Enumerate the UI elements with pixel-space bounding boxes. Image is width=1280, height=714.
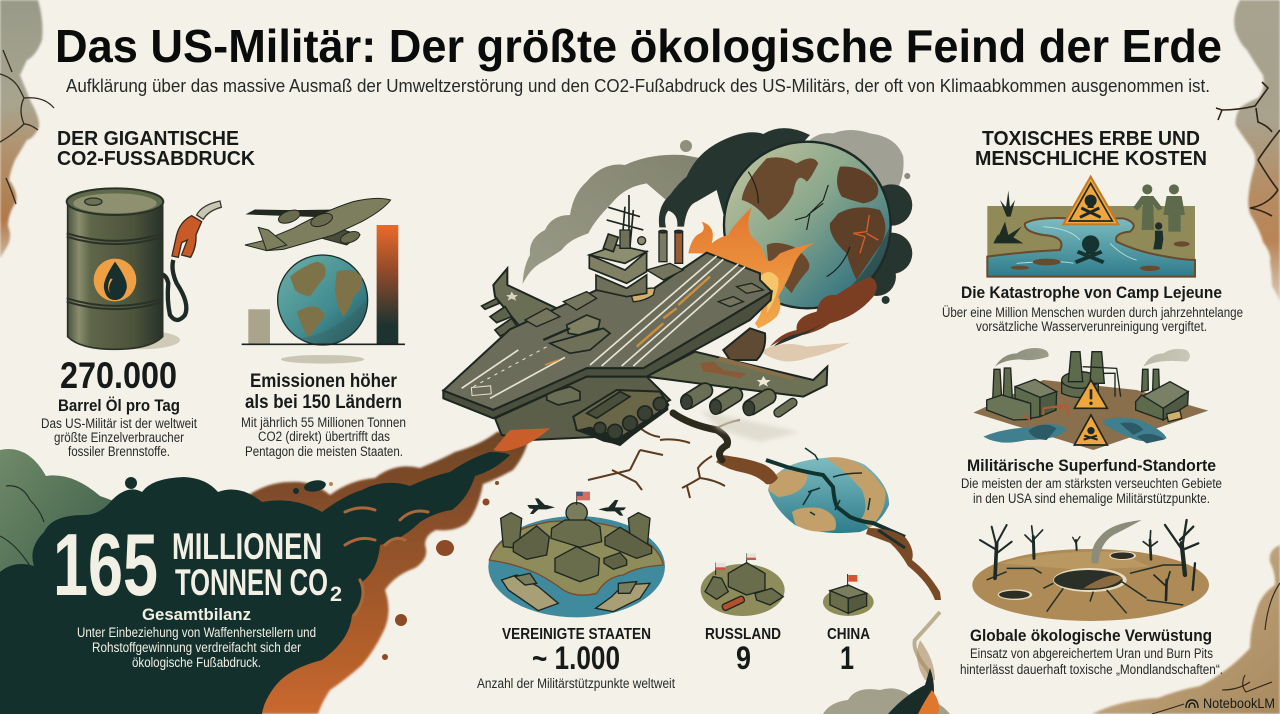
cloud description <box>77 625 316 670</box>
NotebookLM logo: NotebookLM <box>1203 696 1275 711</box>
crack: lower continuation <box>866 528 941 600</box>
subscript 2: 2 <box>330 583 342 606</box>
text: emissions description: CO2 (direkt) übertrifft das <box>258 429 390 444</box>
tank on deck <box>543 315 610 353</box>
dark smoke <box>659 128 810 227</box>
TONNEN CO2: TONNEN CO <box>175 562 328 603</box>
left factory <box>987 368 1057 420</box>
cloud: cracks <box>0 486 44 566</box>
text: largest consumer: Das US-Militär ist der weltweit <box>41 416 197 431</box>
illustration: Russia bases <box>701 553 785 616</box>
label: Russia <box>705 626 781 676</box>
smoke <box>995 348 1190 367</box>
heading: toxic legacy: TOXISCHES ERBE UND <box>982 128 1200 150</box>
illustration: China base <box>823 574 874 616</box>
dead trees <box>980 520 1198 600</box>
icon: airplane, globe, bars <box>242 198 405 364</box>
continents <box>742 157 818 220</box>
cloud: droplets <box>329 481 499 660</box>
cloud description: ökologische Fußabdruck. <box>132 655 261 670</box>
left edge cracked earth <box>0 0 54 258</box>
globe <box>278 255 368 345</box>
text: Camp Lejeune: vorsätzliche Wasserverunreinigung vergiftet. <box>976 319 1207 334</box>
hull side <box>443 292 772 418</box>
centre tanks <box>1062 352 1121 397</box>
heading: CO2 footprint <box>57 128 256 170</box>
text: emissions description <box>241 415 406 459</box>
globe cracks <box>748 172 850 277</box>
heading: toxic legacy <box>975 128 1207 170</box>
left wing <box>493 268 557 327</box>
label: barrel per day: Barrel Öl pro Tag <box>58 396 180 415</box>
stat: 270.000: 270.000 <box>60 355 177 396</box>
text: global devastation: hinterlässt dauerhaft toxische „Mondlandschaften“. <box>960 662 1223 677</box>
illustration: superfund sites <box>973 348 1208 450</box>
label: China: 1 <box>840 640 854 676</box>
engines right <box>688 391 793 413</box>
planes <box>527 498 555 514</box>
right wing <box>647 352 827 397</box>
illustration: US bases <box>488 492 665 617</box>
main crater <box>1053 568 1127 592</box>
stat: emissions <box>245 371 402 413</box>
cloud description: Unter Einbeziehung von Waffenherstellern und <box>77 625 316 640</box>
bottom smoke with flame <box>823 668 950 714</box>
cloud: dark mass <box>0 452 510 714</box>
165 figure: 165 <box>53 515 158 614</box>
label: United States <box>477 626 675 691</box>
shadow below ship <box>700 410 800 442</box>
flag <box>575 492 578 505</box>
gray smoke upper right <box>807 130 904 190</box>
cracked earth fragment <box>766 448 905 537</box>
text: Superfund: Militärische Superfund-Standorte <box>967 456 1216 475</box>
smoke <box>1091 520 1142 563</box>
cloud: green smoke <box>0 449 122 620</box>
text: largest consumer: größte Einzelverbraucher <box>54 430 184 445</box>
gray smoke <box>523 155 702 284</box>
text: emissions description: Pentagon die meisten Staaten. <box>245 444 403 459</box>
brown smoke <box>770 277 877 347</box>
rear hull and tank <box>723 328 765 360</box>
warning triangle bottom <box>1074 415 1107 445</box>
hull keel <box>495 377 670 440</box>
mast <box>607 195 643 247</box>
crack: through the earth <box>766 460 905 537</box>
label: Russia: RUSSLAND <box>705 626 781 643</box>
people <box>1133 184 1185 232</box>
text: global devastation <box>960 626 1223 677</box>
flames <box>688 207 815 328</box>
stat: emissions: Emissionen höher <box>250 371 398 392</box>
stat: emissions: als bei 150 Ländern <box>245 392 402 413</box>
airplane <box>245 198 391 251</box>
cloud: brown arcs <box>345 508 428 615</box>
dust under wing <box>763 343 850 362</box>
warning triangle <box>1063 177 1118 224</box>
river <box>987 218 1195 277</box>
bottom-right tan cloud <box>1092 545 1280 714</box>
vehicles on deck <box>525 263 763 327</box>
text: largest consumer <box>41 416 197 459</box>
warning triangle top <box>1074 380 1107 408</box>
Gesamtbilanz: Gesamtbilanz <box>142 605 251 624</box>
earth globe <box>724 142 891 308</box>
hose <box>161 260 186 320</box>
small bar <box>248 309 270 344</box>
crack: wisp <box>914 612 940 695</box>
island superstructure <box>589 234 647 297</box>
text: global devastation: Einsatz von abgereichertem Uran und Burn Pits <box>970 646 1213 661</box>
runway lines <box>462 256 745 398</box>
label: China: CHINA <box>827 626 870 643</box>
label: Russia: 9 <box>736 640 751 676</box>
text: global devastation: Globale ökologische Verwüstung <box>970 626 1212 645</box>
heading: CO2 footprint: DER GIGANTISCHE <box>57 128 239 150</box>
ships <box>502 573 650 612</box>
engines left <box>482 298 518 336</box>
buildings <box>501 503 652 582</box>
illustration: crater landscape <box>972 520 1209 621</box>
tall bar <box>377 225 398 344</box>
barrel body <box>68 202 163 349</box>
label: United States: VEREINIGTE STAATEN <box>502 626 651 643</box>
label: United States: ~ 1.000 <box>532 640 620 676</box>
text: Superfund: in den USA sind ehemalige Militärstützpunkte. <box>973 491 1210 506</box>
warehouse <box>1136 369 1188 422</box>
cloud: dark puffs <box>125 477 327 494</box>
text: largest consumer: fossiler Brennstoffe. <box>68 444 170 459</box>
text: Superfund: Die meisten der am stärksten verseuchten Gebiete <box>961 476 1222 491</box>
cloud: brown smoke body <box>235 430 530 714</box>
illustration: poisoned water <box>987 177 1195 277</box>
text: Superfund <box>961 456 1222 506</box>
heading: toxic legacy: MENSCHLICHE KOSTEN <box>975 148 1207 170</box>
grass <box>993 191 1023 243</box>
MILLIONEN: MILLIONEN <box>172 526 322 567</box>
text: emissions description: Mit jährlich 55 Millionen Tonnen <box>241 415 406 430</box>
title: Das US-Militär: Der größte ökologische Feind der Erde <box>55 20 1222 72</box>
text: Camp Lejeune <box>942 283 1243 334</box>
funnels <box>659 230 683 263</box>
label: United States: Anzahl der Militärstützpunkte weltweit <box>477 676 675 691</box>
deck <box>443 253 772 410</box>
icon: oil barrel with nozzle <box>67 188 221 349</box>
cloud description: Rohstoffgewinnung verdreifacht sich der <box>92 640 301 655</box>
bottom-left CO2 cloud <box>0 430 530 714</box>
right edge cracked earth <box>1216 0 1280 302</box>
nozzle <box>172 216 202 257</box>
hero: warship, smoke and burning earth <box>443 128 912 451</box>
text: Camp Lejeune: Die Katastrophe von Camp Lejeune <box>961 283 1222 302</box>
heading: CO2 footprint: CO2-FUSSABDRUCK <box>57 148 256 170</box>
subtitle: Aufklärung über das massive Ausmaß der Umweltzerstörung und den CO2-Fußabdruck des US-Militärs, der oft von Klimaabkommen ausgenommen ist. <box>66 75 1210 96</box>
ground cracks <box>987 565 1183 613</box>
label: China <box>827 626 870 676</box>
puddles <box>983 417 1167 443</box>
crack running from ship through earth <box>588 410 941 695</box>
tank under hull <box>573 390 668 445</box>
skull in water <box>1075 235 1105 264</box>
